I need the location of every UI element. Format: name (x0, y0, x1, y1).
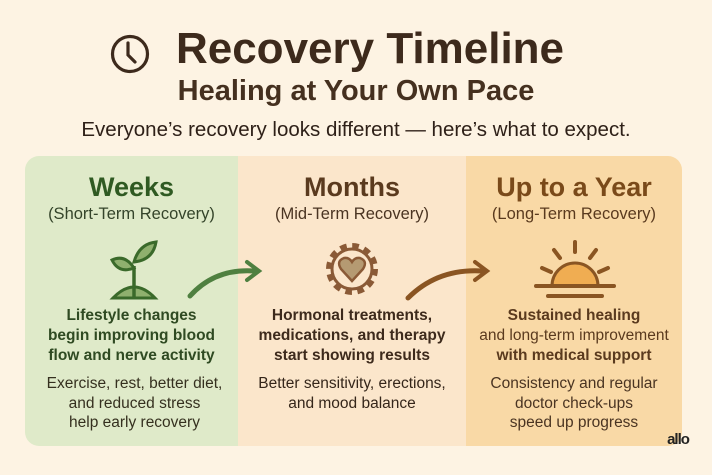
text: main: Hormonal treatments, (272, 307, 432, 324)
icon: clock (110, 34, 150, 74)
text: detail: speed up progress (510, 414, 638, 431)
text: main: with medical support (496, 347, 652, 364)
text: detail: Better sensitivity, erections, (258, 375, 446, 392)
title: Recovery Timeline (176, 24, 564, 73)
text: main (479, 307, 669, 364)
column: year (479, 172, 669, 431)
logo: allo: allo (667, 431, 689, 448)
arrow: brown (406, 260, 490, 300)
text: detail (490, 375, 658, 431)
text: main: and long-term improvement (479, 327, 669, 344)
text: main (259, 307, 446, 364)
text: detail (258, 375, 446, 412)
subheading: (Long-Term Recovery) (492, 205, 656, 223)
heading: weeks: Weeks (89, 172, 174, 202)
text: main: flow and nerve activity (48, 347, 215, 364)
icon: sunrise (534, 240, 616, 298)
text: detail: help early recovery (69, 414, 200, 431)
tagline: Everyone’s recovery looks different — here’s what to expect. (81, 118, 631, 141)
subheading: (Mid-Term Recovery) (275, 205, 429, 223)
text: main (48, 307, 215, 364)
heading: year: Up to a Year (496, 172, 652, 202)
column: months (258, 172, 446, 412)
text: main: Sustained healing (508, 307, 640, 324)
text: detail: and mood balance (288, 394, 416, 412)
text: main: Lifestyle changes (66, 307, 197, 324)
arrow: green (188, 260, 262, 298)
column: weeks (47, 172, 222, 431)
text: detail (47, 375, 222, 431)
subheading: (Short-Term Recovery) (48, 205, 215, 223)
text: detail: Consistency and regular (490, 375, 658, 392)
text: detail: and reduced stress (69, 394, 200, 412)
text: detail: Exercise, rest, better diet, (47, 375, 222, 392)
icon: gear heart (326, 243, 378, 295)
panel: timeline (25, 156, 682, 446)
text: main: start showing results (274, 347, 430, 364)
heading: months: Months (304, 172, 400, 202)
text: detail: doctor check-ups (515, 394, 633, 412)
icon: sprout (110, 240, 158, 300)
text: main: medications, and therapy (259, 327, 445, 344)
text: main: begin improving blood (48, 327, 215, 344)
subtitle: Healing at Your Own Pace (178, 75, 534, 107)
